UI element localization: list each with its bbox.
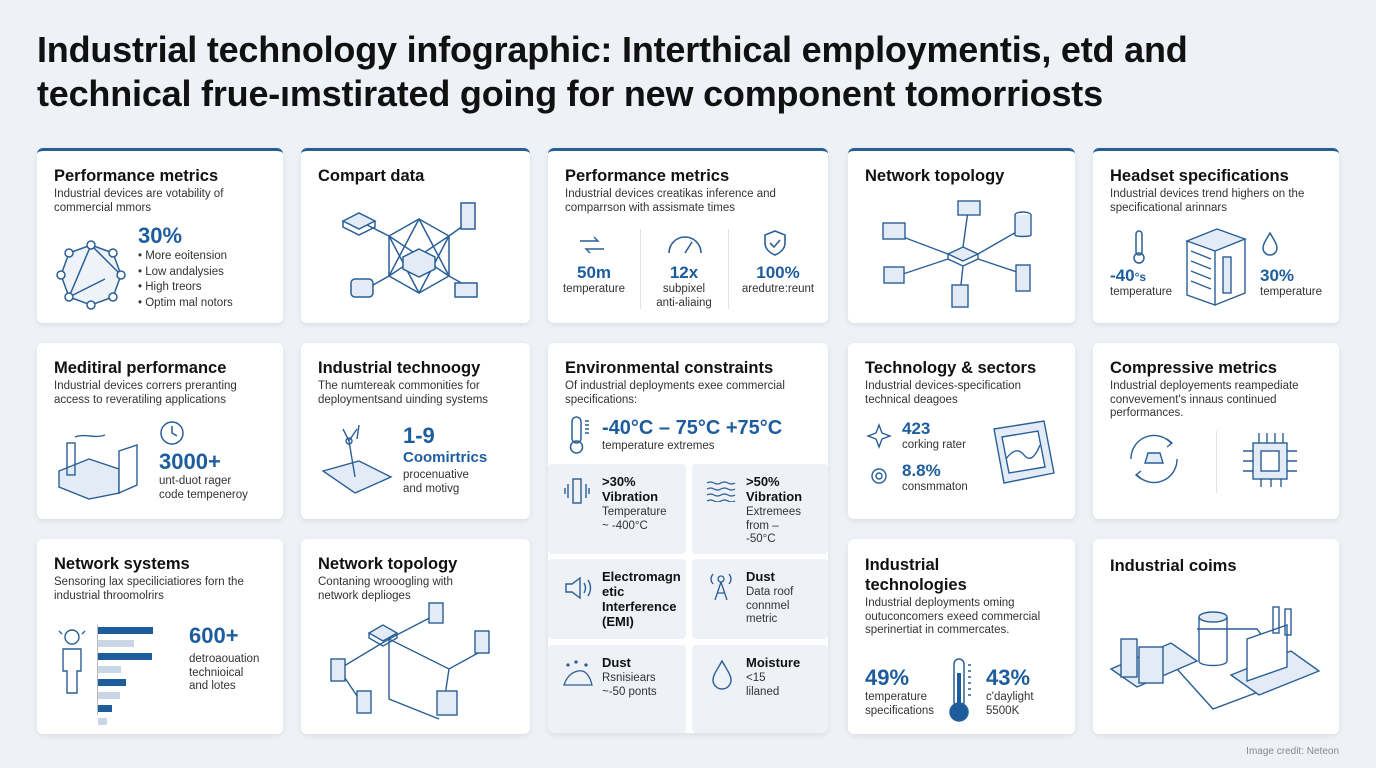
- panel: performance metrics 2: 100%: [756, 263, 800, 282]
- panel: industrial technology: deploymentsand uinding systems: [318, 394, 488, 406]
- panel: environmental constraints: [548, 343, 828, 733]
- tile: EMI: (EMI): [602, 614, 634, 629]
- panel: performance metrics 2: 12x: [670, 263, 698, 282]
- panel: network topology 2: [301, 539, 530, 734]
- tile: EMI: Electromagn: [602, 569, 681, 584]
- stat: 43%: 43%: [986, 665, 1030, 690]
- icon: factory: [58, 434, 138, 500]
- panel: environmental constraints: specifications:: [565, 394, 637, 406]
- tile: vibration 30: Vibration: [602, 489, 658, 504]
- icon: network hub: [882, 200, 1032, 308]
- stat: 423: 423: [902, 419, 930, 438]
- title: Industrial technology infographic: Interthical employmentis, etd and: [37, 29, 1188, 70]
- icon: thermometer: [949, 658, 971, 722]
- panel: compressive metrics: convevement's innaus continued: [1110, 394, 1276, 406]
- icon: star: [866, 423, 892, 449]
- icon: person: [58, 629, 86, 694]
- panel: compart data: [301, 148, 530, 323]
- panel: network topology 2: Network topology: [318, 555, 457, 573]
- stat: 30%: [1260, 266, 1322, 298]
- icon: cube network: [342, 202, 478, 298]
- stat: 30%: • Low andalysies: [138, 266, 224, 278]
- tile: vibration 50: Extremees: [746, 506, 801, 518]
- icon: drop: [1262, 232, 1278, 256]
- icon: clock: [160, 421, 184, 445]
- panel: industrial coims: [1093, 539, 1339, 734]
- tile: vibration 50: from –: [746, 520, 779, 532]
- panel: compart data: Compart data: [318, 167, 424, 185]
- tile: moisture: [692, 645, 828, 733]
- icon: flow: [580, 236, 604, 254]
- icon: thermometer: [570, 416, 589, 454]
- panel: environmental constraints: Of industrial deployments exee commercial: [565, 380, 785, 392]
- stat: 600+: [189, 623, 259, 692]
- tile: moisture: <15: [746, 672, 766, 684]
- stat: 600+: 600+: [189, 623, 239, 648]
- tile: vibration 30: [548, 464, 686, 554]
- tile: moisture: lilaned: [746, 686, 779, 698]
- icon: robotic arm: [322, 424, 392, 494]
- stat: 43%: c'daylight: [986, 691, 1034, 703]
- panel: performance metrics 2: temperature: [563, 283, 625, 295]
- icon: gear: [871, 468, 887, 484]
- tile: dust particles: Rsnisiears: [602, 672, 656, 684]
- panel: technology & sectors: technical deagoes: [865, 394, 958, 406]
- stat: 49%: temperature: [865, 691, 927, 703]
- icon: isometric network: [330, 602, 490, 720]
- stat: 43%: [986, 665, 1034, 716]
- stat: 43%: 5500K: [986, 704, 1019, 716]
- stat: 1-9: [403, 423, 487, 494]
- stat: temperature extremes: temperature extremes: [602, 440, 714, 452]
- panel: network topology 1: [848, 148, 1075, 323]
- stat: 3000+: unt-duot rager: [159, 475, 231, 487]
- stat: 30%: • More eoitension: [138, 250, 227, 262]
- panel: industrial technology: [301, 343, 530, 519]
- panel: performance metrics 1: commercial mmors: [54, 202, 151, 214]
- panel: performance metrics 2: aredutre:reunt: [742, 283, 814, 295]
- panel: network topology 2: network deplioges: [318, 590, 411, 602]
- panel: industrial technologies: Industrial deployments oming: [865, 597, 1015, 609]
- stat: 8.8%: [902, 461, 968, 493]
- stat: 8.8%: 8.8%: [902, 461, 941, 480]
- stat: 423: corking rater: [902, 439, 966, 451]
- stat: 3000+: code tempeneroy: [159, 488, 248, 500]
- stat: 49%: [865, 665, 934, 716]
- stat: 30%: 30%: [138, 223, 182, 248]
- stat: 1-9: and motivg: [403, 482, 459, 494]
- tile: vibration 50: Vibration: [746, 489, 802, 504]
- tile: dust data: Dust: [746, 569, 775, 584]
- icon: isometric facility: [1110, 606, 1320, 710]
- tile: EMI: Interference: [602, 599, 676, 614]
- panel: technology & sectors: Industrial devices-specification: [865, 380, 1021, 392]
- tile: dust data: metric: [746, 613, 777, 625]
- icon: server rack: [1185, 228, 1247, 306]
- tile: dust particles: [548, 645, 686, 733]
- stat: 30%: 30%: [1260, 266, 1294, 285]
- panel: industrial technologies: [848, 539, 1075, 734]
- icon: tablet: [993, 420, 1055, 484]
- tile: dust data: [692, 559, 828, 639]
- stat: -40: temperature: [1110, 286, 1172, 298]
- stat: temperature extremes: -40°C – 75°C +75°C: [602, 417, 782, 439]
- panel: industrial technologies: outuconcomers exeed commercial: [865, 610, 1040, 622]
- icon: network polygon: [56, 240, 126, 310]
- stat: 30%: [138, 223, 233, 308]
- panel: compressive metrics: Compressive metrics: [1110, 359, 1277, 377]
- title: technical frue-ımstirated going for new component tomorriosts: [37, 73, 1103, 114]
- title: [37, 29, 1188, 114]
- tile: vibration 30: Temperature: [602, 506, 667, 518]
- panel: technology & sectors: Technology & sectors: [865, 359, 1036, 377]
- panel: network topology 1: Network topology: [865, 167, 1004, 185]
- tile: vibration 30: >30%: [602, 474, 636, 489]
- stat: 30%: • High treors: [138, 281, 201, 293]
- panel: performance metrics 1: Industrial devices are votability of: [54, 188, 223, 200]
- panel: network topology 2: Contaning wrooogling with: [318, 576, 453, 588]
- tile: vibration 50: >50%: [746, 474, 780, 489]
- panel: industrial technologies: Industrial: [865, 556, 939, 574]
- stat: 600+: technioical: [189, 666, 243, 678]
- stats row: [563, 263, 814, 308]
- panel: meditiral performance: access to reveratiling applications: [54, 394, 226, 406]
- stat: 1-9: procenuative: [403, 469, 469, 481]
- stat: 423: [902, 419, 966, 451]
- stat: 49%: specifications: [865, 704, 934, 716]
- icon: shield: [764, 230, 786, 256]
- tile: vibration 30: ~ -400°C: [602, 520, 648, 532]
- icon: thermometer: [1133, 230, 1145, 264]
- panel: performance metrics 2: subpixel: [663, 283, 705, 295]
- panel: meditiral performance: Industrial devices corrers preranting: [54, 380, 237, 392]
- stat: temperature extremes: [602, 417, 782, 452]
- tile: EMI: etic: [602, 584, 624, 599]
- panel: headset specifications: Industrial devices trend highers on the: [1110, 188, 1304, 200]
- credit: Image credit: Neteon: [1246, 746, 1339, 757]
- tile: dust particles: Dust: [602, 655, 631, 670]
- panel: performance metrics 2: [548, 148, 828, 323]
- panel: industrial technology: The numtereak commonities for: [318, 380, 480, 392]
- panel: performance metrics 2: 50m: [577, 263, 611, 282]
- panel: industrial technology: Industrial technoogy: [318, 359, 480, 377]
- stat: 3000+: [159, 449, 248, 500]
- icon: chip: [1243, 433, 1297, 487]
- panel: meditiral performance: [37, 343, 283, 519]
- tile: EMI: [548, 559, 686, 639]
- panel: performance metrics 2: Industrial devices creatikas inference and: [565, 188, 776, 200]
- panel: headset specifications: [1093, 148, 1339, 323]
- panel: network systems: industrial throomolrirs: [54, 590, 164, 602]
- panel: headset specifications: Headset specifications: [1110, 167, 1289, 185]
- stat: 8.8%: consmmaton: [902, 481, 968, 493]
- panel: headset specifications: specificational arinnars: [1110, 202, 1227, 214]
- bar chart: [97, 625, 197, 715]
- stat: 30%: temperature: [1260, 286, 1322, 298]
- panel: technology & sectors: [848, 343, 1075, 519]
- panel: meditiral performance: Meditiral performance: [54, 359, 226, 377]
- panel: environmental constraints: Environmental constraints: [565, 359, 773, 377]
- tile: dust data: Data roof: [746, 586, 793, 598]
- panel: performance metrics 2: comparrson with assismate times: [565, 202, 735, 214]
- panel: performance metrics 2: anti-aliaing: [656, 296, 712, 308]
- stat: 600+: and lotes: [189, 680, 236, 692]
- stat: 600+: detroaouation: [189, 653, 259, 665]
- tile: dust particles: ~-50 ponts: [602, 686, 657, 698]
- stat: 49%: 49%: [865, 665, 909, 690]
- panel: network systems: [37, 539, 283, 734]
- stat: 3000+: 3000+: [159, 449, 221, 474]
- panel: network systems: Network systems: [54, 555, 190, 573]
- panel: network systems: Sensoring lax speciliciatiores forn the: [54, 576, 244, 588]
- panel: compressive metrics: [1093, 343, 1339, 519]
- tile: moisture: Moisture: [746, 655, 800, 670]
- stat: 1-9: Coomirtrics: [403, 449, 487, 466]
- tile: dust data: connmel: [746, 600, 789, 612]
- panel: performance metrics 1: [37, 148, 283, 323]
- panel: compressive metrics: Industrial deployements reampediate: [1110, 380, 1299, 392]
- panel: compressive metrics: performances.: [1110, 407, 1184, 419]
- panel: industrial technologies: technologies: [865, 576, 967, 594]
- panel: industrial coims: Industrial coims: [1110, 557, 1237, 575]
- stat: 30%: • Optim mal notors: [138, 296, 233, 308]
- tile: vibration 50: -50°C: [746, 533, 776, 545]
- stat: -40: -40°s: [1110, 266, 1146, 285]
- icon: gauge: [668, 236, 702, 254]
- panel: performance metrics 1: Performance metrics: [54, 167, 218, 185]
- stat: 1-9: 1-9: [403, 423, 435, 448]
- panel: industrial technologies: sperinertiat in commercates.: [865, 624, 1009, 636]
- panel: performance metrics 2: Performance metrics: [565, 167, 729, 185]
- tile: vibration 50: [692, 464, 828, 554]
- stat: -40: [1110, 266, 1172, 298]
- icon: cycle: [1130, 434, 1178, 484]
